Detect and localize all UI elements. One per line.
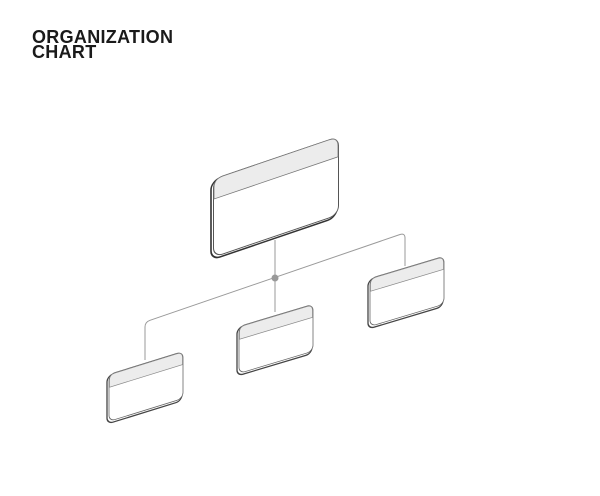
node dot	[272, 274, 278, 282]
box: right	[368, 256, 444, 329]
title: ORGANIZATION	[32, 27, 173, 47]
connector lines	[145, 234, 405, 360]
box: bottom left	[107, 351, 183, 424]
title	[32, 27, 173, 62]
box: bottom middle	[237, 304, 313, 376]
box: top main	[211, 137, 338, 260]
title: CHART	[32, 42, 96, 62]
